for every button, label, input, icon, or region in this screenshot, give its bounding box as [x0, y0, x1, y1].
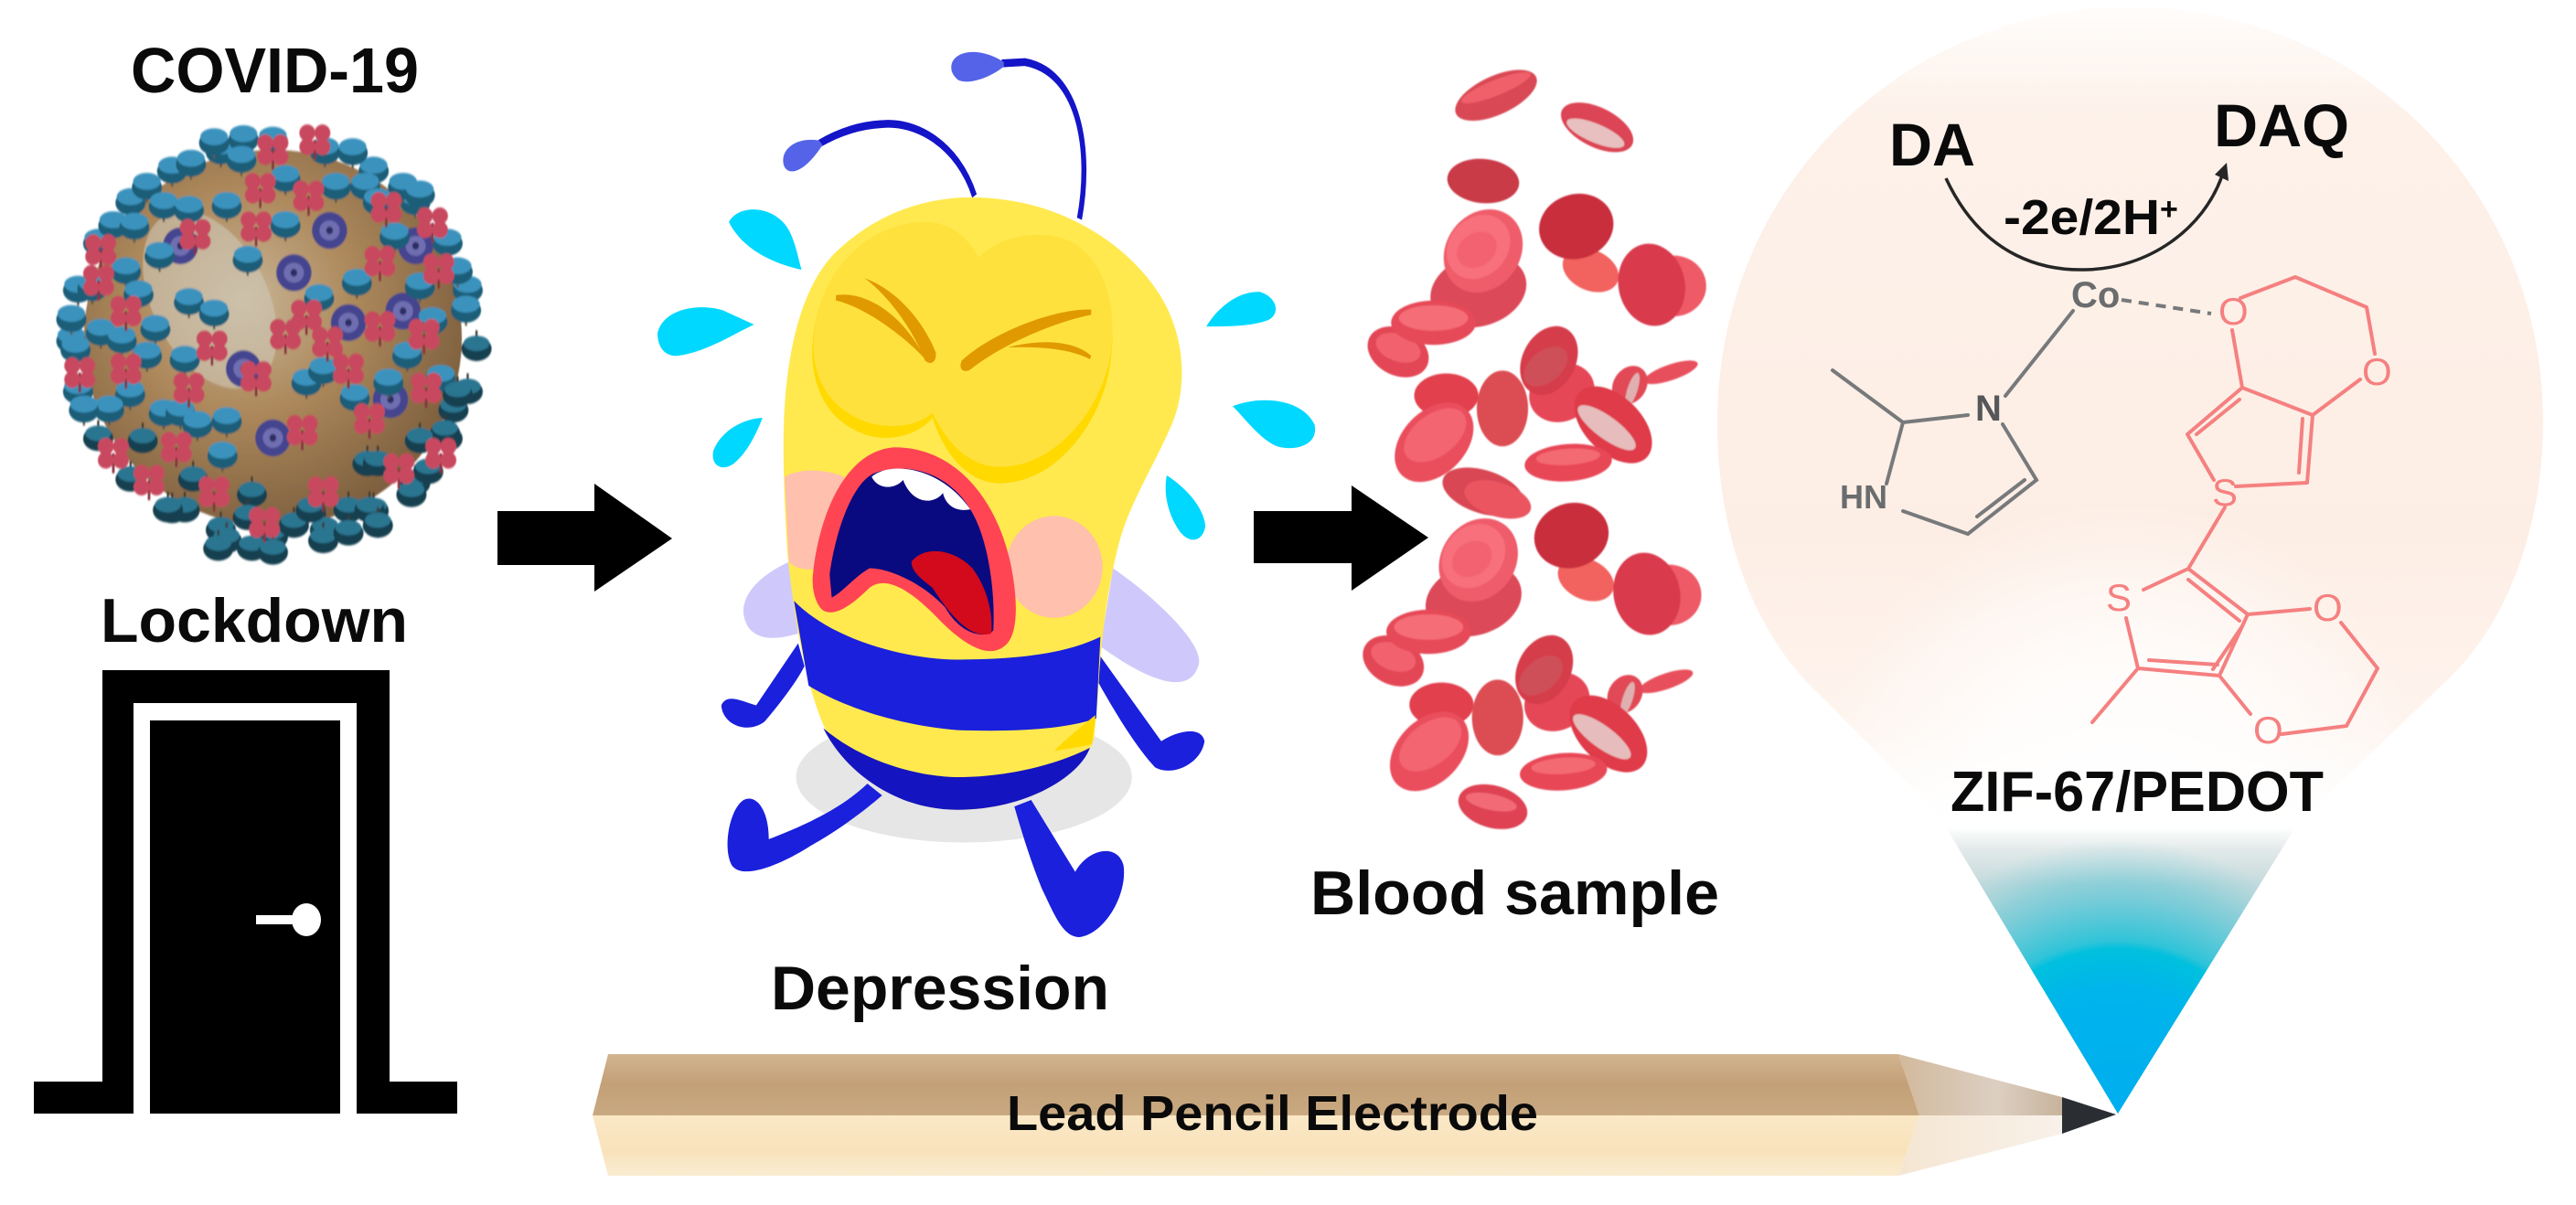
antennae [783, 52, 1084, 219]
bee body [784, 197, 1181, 810]
heading: Lockdown: Lockdown [101, 586, 408, 656]
chemical structure: 2-methylimidazole bound to Co [1833, 275, 2211, 534]
pencil lead tip [2062, 1097, 2116, 1134]
tears [657, 209, 1315, 539]
icon: closed door [34, 670, 457, 1114]
chemical structure: PEDOT: S [2212, 471, 2238, 514]
panel: magnified electrode surface bubble [1717, 7, 2543, 822]
sharpened cone [1898, 1054, 2062, 1176]
eyes squeezed shut [836, 278, 1091, 371]
chemical structure: PEDOT [2092, 277, 2392, 752]
door knob [256, 903, 321, 936]
pencil electrode [593, 1054, 2116, 1176]
chemical structure: 2-methylimidazole bound to Co: N [1975, 389, 2002, 429]
pencil top face [593, 1054, 1919, 1115]
reaction: DA to DAQ [1889, 91, 2349, 270]
label: electron and proton transfer: + [2160, 192, 2178, 227]
label: electron and proton transfer: -2e/2H [2004, 190, 2160, 245]
label: DAQ: DAQ [2214, 91, 2349, 159]
blue stripes [794, 601, 1100, 810]
chemical structure: PEDOT: S [2106, 576, 2132, 619]
curved reaction arrow [1946, 163, 2229, 270]
face shading [812, 222, 1113, 484]
illustration: crying bee [657, 52, 1315, 937]
label: ZIF-67/PEDOT: ZIF-67/PEDOT [1951, 761, 2324, 824]
label: Lead Pencil Electrode: Lead Pencil Electrode [1007, 1086, 1538, 1141]
cheeks [785, 471, 1103, 618]
limbs [721, 644, 1204, 937]
chemical structure: PEDOT: O [2362, 350, 2392, 393]
wings [743, 561, 1199, 682]
crying mouth [813, 447, 1016, 651]
icon: coronavirus particle [57, 124, 492, 565]
arrow: lockdown to depression [497, 484, 672, 592]
chemical structure: 2-methylimidazole bound to Co: HN [1840, 478, 1887, 516]
label: Blood sample: Blood sample [1310, 858, 1719, 928]
chemical structure: 2-methylimidazole bound to Co: Co [2071, 275, 2120, 315]
label: DA: DA [1889, 111, 1975, 178]
illustration: red blood cells [1361, 59, 1706, 835]
pencil bottom face [593, 1115, 1919, 1176]
chemical structure: PEDOT: O [2218, 290, 2249, 333]
light beam from pencil tip [1946, 827, 2295, 1114]
chemical structure: PEDOT: O [2313, 586, 2343, 629]
arrow: depression to blood sample [1254, 485, 1428, 591]
chemical structure: PEDOT: O [2253, 709, 2283, 752]
heading: COVID-19: COVID-19 [131, 35, 419, 106]
label: Depression: Depression [771, 954, 1109, 1023]
